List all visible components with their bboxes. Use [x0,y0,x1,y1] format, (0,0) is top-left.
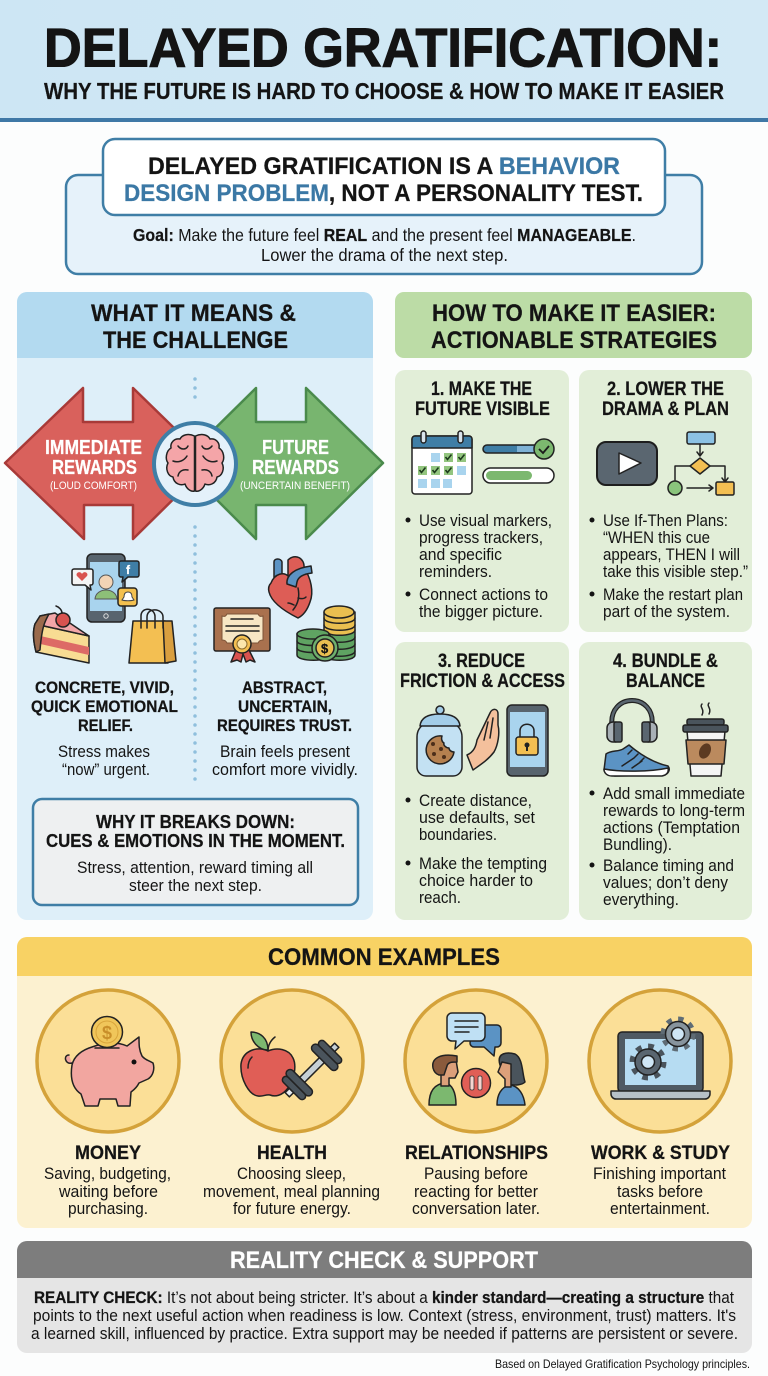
strategy 3 bullets: reach. [419,889,461,907]
example: money [37,990,179,1218]
example: relationships: Pausing before [424,1164,528,1183]
icon: cake slice [34,606,89,663]
header banner [0,0,768,122]
right column text: future: ABSTRACT, [242,678,327,697]
goal callout: DESIGN PROBLEM, NOT A PERSONALITY TEST. [124,180,643,207]
panel: strategy 3: 3. REDUCE [438,651,525,672]
right column text: future: REQUIRES TRUST. [217,716,352,735]
callout: why it breaks down [33,799,358,905]
panel: common examples [17,937,752,1228]
reality check text [31,1289,738,1343]
panel: strategy 4: BALANCE [626,671,705,692]
example: health: for future energy. [233,1199,351,1218]
example: work and study: Finishing important [593,1164,726,1183]
icon: brain [154,423,236,505]
panel: strategy 1: 1. MAKE THE [431,379,532,400]
arrow: future rewards: FUTURE [262,437,329,459]
strategy 3 bullets: Create distance, [419,792,532,810]
arrow: immediate rewards: REWARDS [52,457,137,479]
icon: piggy bank: $ [102,1023,112,1043]
strategy 4 bullets: Bundling). [603,836,672,854]
reality check text: points to the next useful action when readiness is low. Context (stress, environment, trust) matters. It's [33,1307,736,1325]
strategy 1 bullets: Use visual markers, [419,512,552,530]
right column text: future [212,678,358,779]
panel: strategy 1: FUTURE VISIBLE [415,399,550,420]
strategy 1 bullets [406,512,552,621]
strategy 1 bullets: progress trackers, [419,529,543,547]
strategy 4 bullets: values; don’t deny [603,874,729,892]
right column text: future: UNCERTAIN, [238,697,332,716]
strategy 4 bullets [590,785,745,909]
strategy 4 bullets: actions (Temptation [603,819,740,837]
strategy 2 bullets [590,512,748,621]
callout headline: DELAYED GRATIFICATION IS A BEHAVIOR [148,153,620,180]
arrow: immediate rewards: IMMEDIATE [45,437,142,459]
reality check text: REALITY CHECK: It’s not about being stricter. It’s about a kinder standard—creating a structure that [34,1289,734,1307]
strategy 2 bullets: Make the restart plan [603,586,743,604]
example: money: waiting before [58,1182,158,1201]
panel: what it means and the challenge: THE CHALLENGE [103,327,288,354]
strategy 4 bullets: everything. [603,891,679,909]
icon: calendar and progress bars [412,431,554,494]
example: money: purchasing. [68,1199,148,1218]
label: money: MONEY [75,1142,141,1164]
callout: why it breaks down: Stress, attention, reward timing all [77,858,313,877]
arrow: future rewards: REWARDS [252,457,339,479]
icon: phone with social notifications: f [126,563,131,577]
icon: conversation with pause [429,1013,525,1105]
strategy 1 bullets: reminders. [419,563,492,581]
callout: why it breaks down: CUES & EMOTIONS IN THE MOMENT. [46,831,345,851]
title: DELAYED GRATIFICATION: [44,16,722,78]
example: health: Choosing sleep, [237,1164,346,1183]
panel: what it means and the challenge [5,292,383,920]
strategy 1 bullets: Connect actions to [419,586,548,604]
example: work and study [589,990,731,1218]
left column text: immediate: RELIEF. [78,716,133,735]
goal callout: Lower the drama of the next step. [261,245,508,265]
example: work and study: tasks before [617,1182,703,1201]
reality check heading: REALITY CHECK & SUPPORT [230,1247,538,1274]
example: relationships: reacting for better [414,1182,538,1201]
strategy 4 bullets: rewards to long-term [603,802,745,820]
strategy 4 bullets: Add small immediate [603,785,745,803]
goal text: Goal: Make the future feel REAL and the present feel MANAGEABLE. [133,225,636,245]
panel heading: WHAT IT MEANS & [91,300,296,327]
example: health [203,990,380,1218]
panel: strategy 3: FRICTION & ACCESS [400,671,565,692]
icon: shopping bag [129,609,176,663]
example: health: movement, meal planning [203,1182,380,1201]
panel: strategy 3 [395,642,569,920]
arrow: future rewards: (UNCERTAIN BENEFIT) [240,480,350,492]
strategy 3 bullets [406,792,547,907]
heading: how to make it easier: HOW TO MAKE IT EASIER: [432,300,716,327]
right column text: future: Brain feels present [220,742,350,761]
label: health: HEALTH [257,1142,327,1164]
callout: why it breaks down: steer the next step. [129,876,262,895]
panel: reality check and support [17,1241,752,1353]
example: work and study: entertainment. [610,1199,710,1218]
example: relationships: conversation later. [412,1199,540,1218]
left column text: immediate: Stress makes [58,742,150,761]
strategy 2 bullets: part of the system. [603,603,730,621]
strategy 2 bullets: appears, THEN I will [603,546,740,564]
panel: strategy 4 [579,642,752,920]
strategy 3 bullets: Make the tempting [419,855,547,873]
arrow: future rewards [180,388,383,539]
icon: apple and dumbbell [241,1032,349,1107]
left column text: immediate: QUICK EMOTIONAL [31,697,178,716]
panel: strategy 4: 4. BUNDLE & [613,651,718,672]
panel: strategy 2: DRAMA & PLAN [602,399,729,420]
left column text: immediate: CONCRETE, VIVID, [35,678,174,697]
strategy 3 bullets: choice harder to [419,872,533,890]
icon: coin stacks: $ [321,641,329,656]
label: work and study: WORK & STUDY [591,1142,730,1164]
strategy 2 bullets: Use If-Then Plans: [603,512,728,530]
panel: strategy 2: 2. LOWER THE [607,379,724,400]
panel: strategy 1 [395,370,569,632]
heading: how to make it easier: ACTIONABLE STRATEGIES [431,327,717,354]
right column text: future: comfort more vividly. [212,760,358,779]
strategy 3 bullets: boundaries. [419,826,497,844]
strategy 1 bullets: the bigger picture. [419,603,543,621]
icon: anatomical heart [269,557,312,618]
example: relationships [405,990,548,1218]
label: relationships: RELATIONSHIPS [405,1142,548,1164]
left column text: immediate: “now” urgent. [62,760,150,779]
arrow: immediate rewards: (LOUD COMFORT) [50,480,137,492]
goal callout [66,139,702,274]
icon: coin stacks [297,606,355,661]
icon: piggy bank [65,1016,154,1106]
heading: how to make it easier [395,292,752,358]
strategy 2 bullets: “WHEN this cue [603,529,710,547]
left column text: immediate [31,678,178,779]
icon: cookie jar, stop hand, locked phone [417,705,548,776]
icon: laptop with gears [611,1020,710,1099]
reality check text: a learned skill, influenced by practice. Extra support may be needed if patterns are persistent or severe. [31,1325,738,1343]
strategy 1 bullets: and specific [419,546,502,564]
icon: certificate [214,608,270,662]
strategy 2 bullets: take this visible step.” [603,563,748,581]
icon: phone with social notifications [72,554,139,622]
icon: video and flowchart [597,432,734,495]
icon: headphones, shoe, coffee [604,700,728,776]
strategy 4 bullets: Balance timing and [603,857,734,875]
callout: why it breaks down: WHY IT BREAKS DOWN: [96,812,295,832]
arrow: immediate rewards [5,388,210,539]
strategy 3 bullets: use defaults, set [419,809,535,827]
example: money: Saving, budgeting, [44,1164,171,1183]
examples heading: COMMON EXAMPLES [268,944,500,971]
panel: strategy 2 [579,370,752,632]
